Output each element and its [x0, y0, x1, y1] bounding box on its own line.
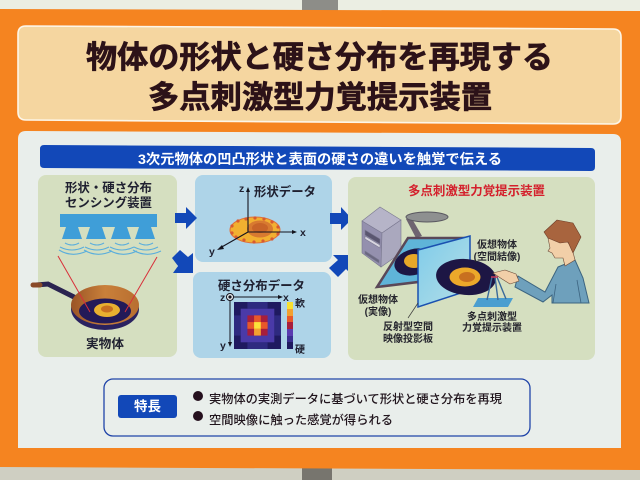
sensing heading: センシング装置 [65, 195, 152, 210]
sensing heading: 形状・硬さ分布 [65, 180, 152, 195]
hardness axes [226, 294, 283, 347]
features badge: 特長 [134, 399, 161, 414]
axis labels: z [239, 183, 244, 195]
title panel [18, 26, 621, 124]
icon: overhead display [406, 212, 448, 238]
arrow: shape data to device [330, 207, 352, 230]
pan label: 実物体 [86, 336, 124, 351]
title line 2: 多点刺激型力覚提示装置 [148, 80, 492, 115]
icon: reflective screen with real image [377, 238, 462, 287]
feature 2: 空間映像に触った感覚が得られる [209, 412, 393, 427]
3D axes [217, 187, 297, 250]
feature 1: 実物体の実測データに基づいて形状と硬さ分布を再現 [209, 391, 502, 406]
title line 1: 物体の形状と硬さ分布を再現する [86, 40, 553, 75]
red sensing lines [58, 256, 157, 312]
axis labels: y [209, 246, 215, 258]
heat axis labels: z [220, 292, 225, 304]
icon: projection board [418, 236, 470, 307]
subtitle bar [40, 145, 595, 171]
icon: frying pan [33, 284, 139, 330]
heat axis labels: x [283, 292, 289, 304]
panel: shape data [195, 175, 332, 262]
device labels: 仮想物体 [477, 238, 517, 251]
device labels: (実像) [365, 305, 391, 318]
pointer line [408, 303, 418, 318]
arrow: to shape data [175, 207, 197, 229]
device labels: 映像投影板 [383, 332, 433, 345]
chart: colour scale [287, 302, 293, 349]
chart: 3D shape disc [230, 216, 280, 244]
subtitle bar: 3次元物体の凹凸形状と表面の硬さの違いを触覚で伝える [138, 151, 502, 167]
features box [104, 379, 530, 436]
icon: sensor array [60, 214, 157, 239]
arrow: hardness data to device [329, 255, 352, 277]
device labels: (空間結像) [474, 250, 520, 263]
chart: hardness heatmap [234, 302, 281, 349]
icon: computer tower [362, 207, 401, 267]
axis labels [209, 183, 306, 258]
hardness heading: 硬さ分布データ [218, 278, 305, 293]
soft and hard labels [295, 297, 305, 356]
device labels: 反射型空間 [383, 320, 433, 333]
device labels: 力覚提示装置 [462, 321, 522, 334]
heat axis labels [220, 292, 289, 352]
device labels [358, 238, 522, 345]
device heading: 多点刺激型力覚提示装置 [408, 183, 545, 198]
arrow: to hardness data [172, 250, 193, 273]
main white panel [18, 131, 621, 448]
heat axis labels: y [220, 340, 226, 352]
panel: sensing device [33, 175, 177, 357]
axis labels: x [300, 227, 306, 239]
device labels: 多点刺激型 [467, 310, 517, 323]
sensing heading [65, 180, 152, 210]
panel: hardness data [193, 272, 331, 358]
icon: haptic device [473, 277, 513, 307]
soft and hard labels: 軟 [295, 297, 305, 310]
features badge [118, 395, 177, 418]
icon: user [493, 220, 589, 303]
soft and hard labels: 硬 [295, 344, 305, 356]
icon: sensing waves [59, 243, 161, 254]
panel: haptic display device [348, 177, 595, 360]
device labels: 仮想物体 [358, 293, 398, 306]
shape data heading: 形状データ [254, 184, 316, 199]
icon: virtual object disc [435, 256, 497, 298]
